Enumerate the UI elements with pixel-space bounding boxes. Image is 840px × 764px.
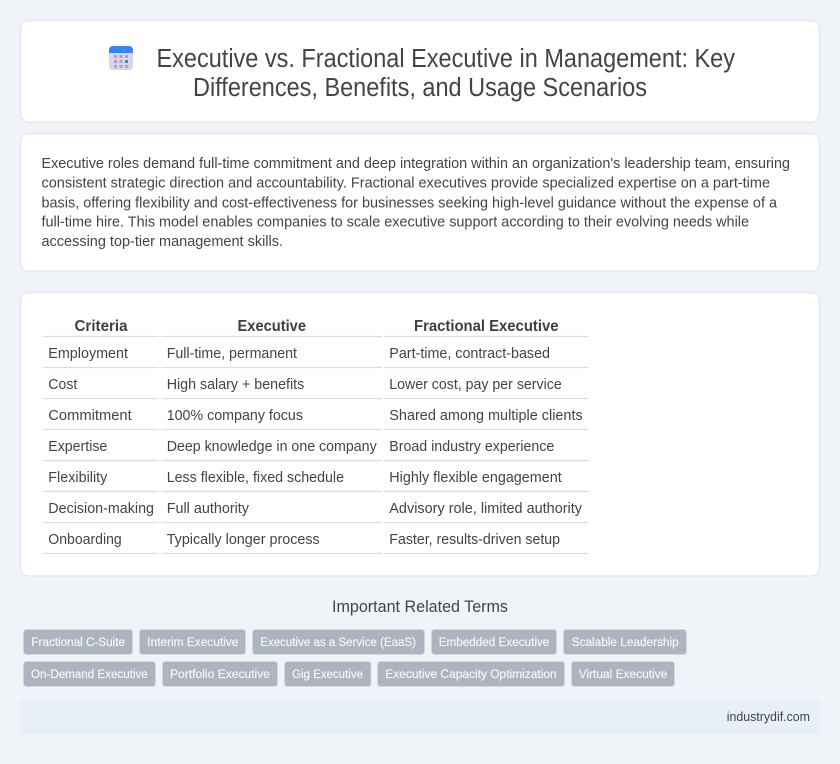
chip: Embedded Executive: Embedded Executive [439,635,549,649]
table header row: Fractional Executive [414,318,559,335]
table row: Cost: Lower cost, pay per service [389,377,562,393]
text block: summary: consistent strategic direction and accountability. Fractional executives provide specialized expertise on a part-time [42,176,770,192]
table row: Commitment: Commitment [48,408,132,424]
chip: Executive as a Service: Executive as a Service (EaaS) [260,635,416,649]
table row: Commitment: Shared among multiple clients [389,408,583,424]
chip: Embedded Executive [432,630,556,654]
chip: Gig Executive: Gig Executive [292,667,363,681]
chip: Portfolio Executive [162,662,278,686]
text block: summary: Executive roles demand full-time commitment and deep integration within an organization's leadership team, ensuring [42,156,790,172]
table row: Commitment [43,408,588,430]
table row: Decision-making: Advisory role, limited authority [389,501,583,517]
table row: Expertise [43,439,588,460]
table row: Flexibility [43,470,588,492]
table row: Flexibility: Highly flexible engagement [389,470,562,486]
chip: Scalable Leadership: Scalable Leadership [572,635,679,649]
table row: Commitment: 100% company focus [167,408,303,424]
chip: Interim Executive [140,630,246,654]
icon: calendar [109,46,133,70]
table row: Onboarding: Typically longer process [167,532,320,548]
table row: Decision-making [43,501,588,522]
title: Differences, Benefits, and Usage Scenarios [193,74,647,102]
footer [20,700,820,734]
table row: Cost: High salary + benefits [167,377,304,393]
table row: Onboarding: Faster, results-driven setup [389,532,560,548]
table row: Cost: Cost [48,377,77,393]
table row: Employment: Part-time, contract-based [389,346,550,362]
table row: Employment [43,346,588,368]
panel: comparison table [20,292,820,576]
table header row: Criteria [74,318,128,335]
footer: industrydif.com [727,709,810,724]
chip: Executive Capacity Optimization [378,662,564,686]
chip: Gig Executive [284,662,371,686]
table row: Flexibility: Flexibility [48,470,108,486]
table row: Expertise: Expertise [48,439,107,455]
chip: On-Demand Executive [24,662,156,686]
text block: summary [42,156,790,250]
chip: Portfolio Executive: Portfolio Executive [170,667,270,681]
chip: Fractional C-Suite [24,630,132,654]
chip: On-Demand Executive: On-Demand Executive [31,667,148,681]
chip: Fractional C-Suite: Fractional C-Suite [31,635,125,649]
table row: Flexibility: Less flexible, fixed schedule [167,470,344,486]
related term chips [24,630,686,686]
chip: Interim Executive: Interim Executive [147,635,238,649]
table header row [43,318,588,336]
table header row: Executive [238,318,306,335]
table row: Expertise: Deep knowledge in one company [167,439,377,455]
panel: header [20,20,820,122]
table row: Cost [43,377,588,398]
chip: Executive Capacity Optimization: Executive Capacity Optimization [385,667,557,681]
panel: summary paragraph [20,134,820,271]
title [156,45,735,102]
text block: summary: basis, offering flexibility and cost-effectiveness for businesses seeking high-level guidance without the expense of a [42,196,778,212]
title: Executive vs. Fractional Executive in Management: Key [156,45,735,73]
heading: related terms: Important Related Terms [332,598,508,616]
chip: Executive as a Service [252,630,424,654]
text block: summary: accessing top-tier management skills. [42,234,283,250]
table row: Employment: Full-time, permanent [167,346,297,362]
chip: Scalable Leadership [564,630,686,654]
table row: Expertise: Broad industry experience [389,439,554,455]
text block: summary: full-time hire. This model enables companies to scale executive support according to their evolving needs while [42,214,749,230]
table row: Onboarding: Onboarding [48,532,122,548]
chip: Virtual Executive: Virtual Executive [579,667,667,681]
chip: Virtual Executive [572,662,674,686]
table row: Decision-making: Decision-making [48,501,154,517]
table row: Onboarding [43,532,588,554]
table row: Decision-making: Full authority [167,501,250,517]
table row: Employment: Employment [48,346,128,362]
